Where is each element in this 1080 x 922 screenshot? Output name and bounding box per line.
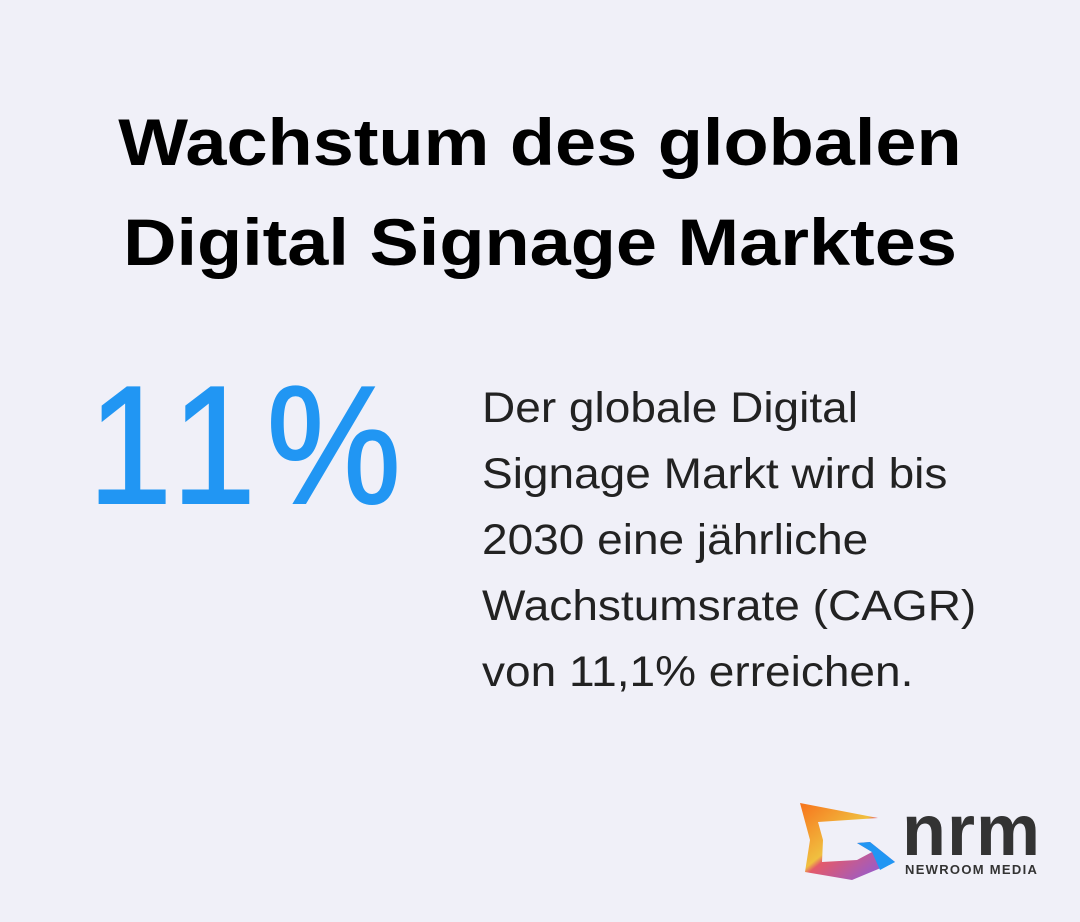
logo text: nrm [902,791,1041,871]
title: Digital Signage Marktes [123,205,957,279]
description text: von 11,1% erreichen. [482,648,913,696]
logo subtitle: NEWROOM MEDIA [905,862,1038,877]
description text [482,384,976,696]
description text: Wachstumsrate (CAGR) [482,582,976,630]
description text: Der globale Digital [482,384,858,432]
big stat: 11%: 11% [88,351,412,539]
description text: 2030 eine jährliche [482,516,868,564]
title [118,105,962,279]
title: Wachstum des globalen [118,105,962,179]
description text: Signage Markt wird bis [482,450,947,498]
